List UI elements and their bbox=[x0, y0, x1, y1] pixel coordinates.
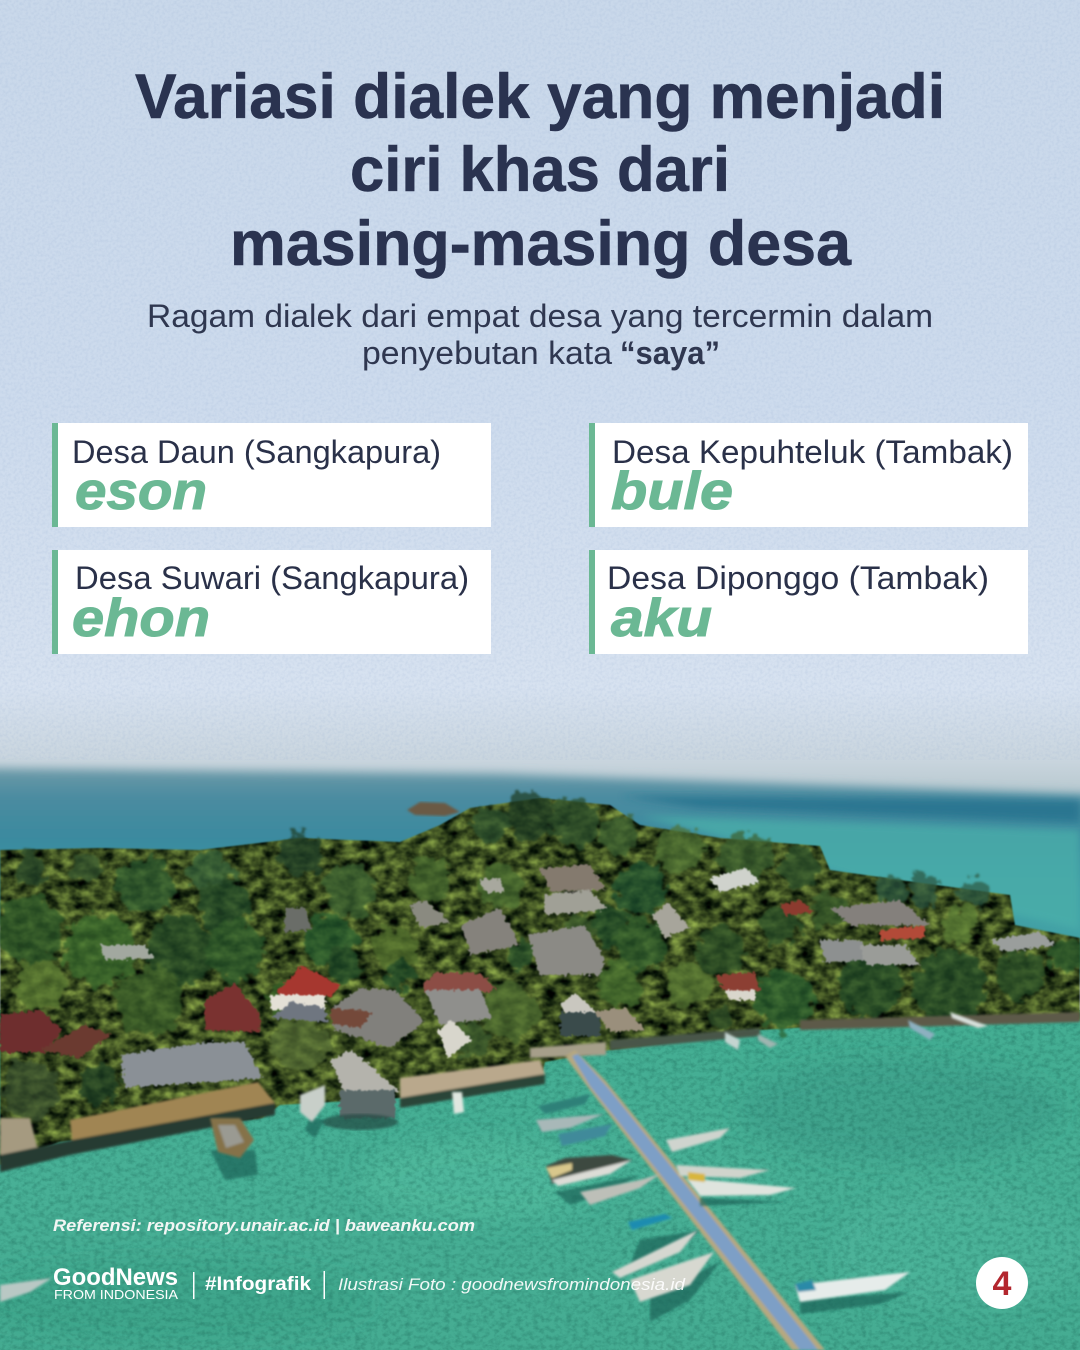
logo: GoodNews bbox=[53, 1264, 178, 1291]
background sky bbox=[0, 0, 1080, 800]
title bbox=[135, 62, 945, 279]
distant sea bbox=[0, 768, 1080, 980]
small islet bbox=[407, 802, 460, 816]
dialect word: aku bbox=[611, 589, 712, 648]
subtitle emphasis: “saya” bbox=[620, 335, 720, 371]
seawall and shore bbox=[0, 1012, 1080, 1172]
hashtag: #Infografik bbox=[205, 1274, 311, 1295]
village name: Desa Kepuhteluk (Tambak) bbox=[612, 434, 1013, 470]
dialect word: ehon bbox=[72, 589, 210, 648]
references: Referensi: repository.unair.ac.id | baweanku.com bbox=[53, 1216, 475, 1235]
lagoon shading bbox=[0, 1060, 1080, 1340]
logo: FROM INDONESIA bbox=[54, 1287, 178, 1302]
sea light shallows bbox=[640, 816, 1080, 930]
pier bbox=[565, 1050, 825, 1350]
foreground lagoon bbox=[0, 1010, 1080, 1350]
village name: Desa Daun (Sangkapura) bbox=[72, 434, 441, 470]
background photo: island and sea bbox=[0, 768, 1080, 1350]
title line 2: ciri khas dari bbox=[350, 135, 730, 205]
boat shadows bbox=[210, 1118, 910, 1322]
subtitle line 1: Ragam dialek dari empat desa yang tercermin dalam bbox=[147, 298, 933, 334]
sea dark band bbox=[620, 796, 1080, 822]
island landmass bbox=[0, 798, 1080, 1165]
card: Desa Suwari bbox=[52, 550, 491, 654]
sky grain texture bbox=[0, 0, 1080, 760]
photo credit: Ilustrasi Foto : goodnewsfromindonesia.id bbox=[338, 1275, 686, 1294]
page number: 4 bbox=[993, 1265, 1012, 1303]
footer bbox=[53, 1264, 686, 1302]
card: Desa Diponggo bbox=[589, 550, 1028, 654]
card: Desa Daun bbox=[52, 423, 491, 527]
trees bbox=[0, 791, 1080, 1120]
page number bbox=[976, 1257, 1028, 1309]
title line 1: Variasi dialek yang menjadi bbox=[135, 62, 945, 132]
subtitle line 2: penyebutan kata bbox=[362, 335, 612, 371]
card: Desa Kepuhteluk bbox=[589, 423, 1028, 527]
village roofs bbox=[0, 865, 1055, 1118]
subtitle bbox=[147, 298, 933, 371]
dialect word: eson bbox=[75, 462, 207, 521]
village name: Desa Suwari (Sangkapura) bbox=[75, 560, 469, 596]
village name: Desa Diponggo (Tambak) bbox=[607, 560, 989, 596]
dialect word: bule bbox=[611, 462, 733, 521]
moored boats bbox=[0, 1012, 988, 1302]
lagoon mottling bbox=[0, 1020, 1080, 1350]
title line 3: masing-masing desa bbox=[230, 209, 852, 279]
house on stilts shadow bbox=[322, 1114, 398, 1130]
